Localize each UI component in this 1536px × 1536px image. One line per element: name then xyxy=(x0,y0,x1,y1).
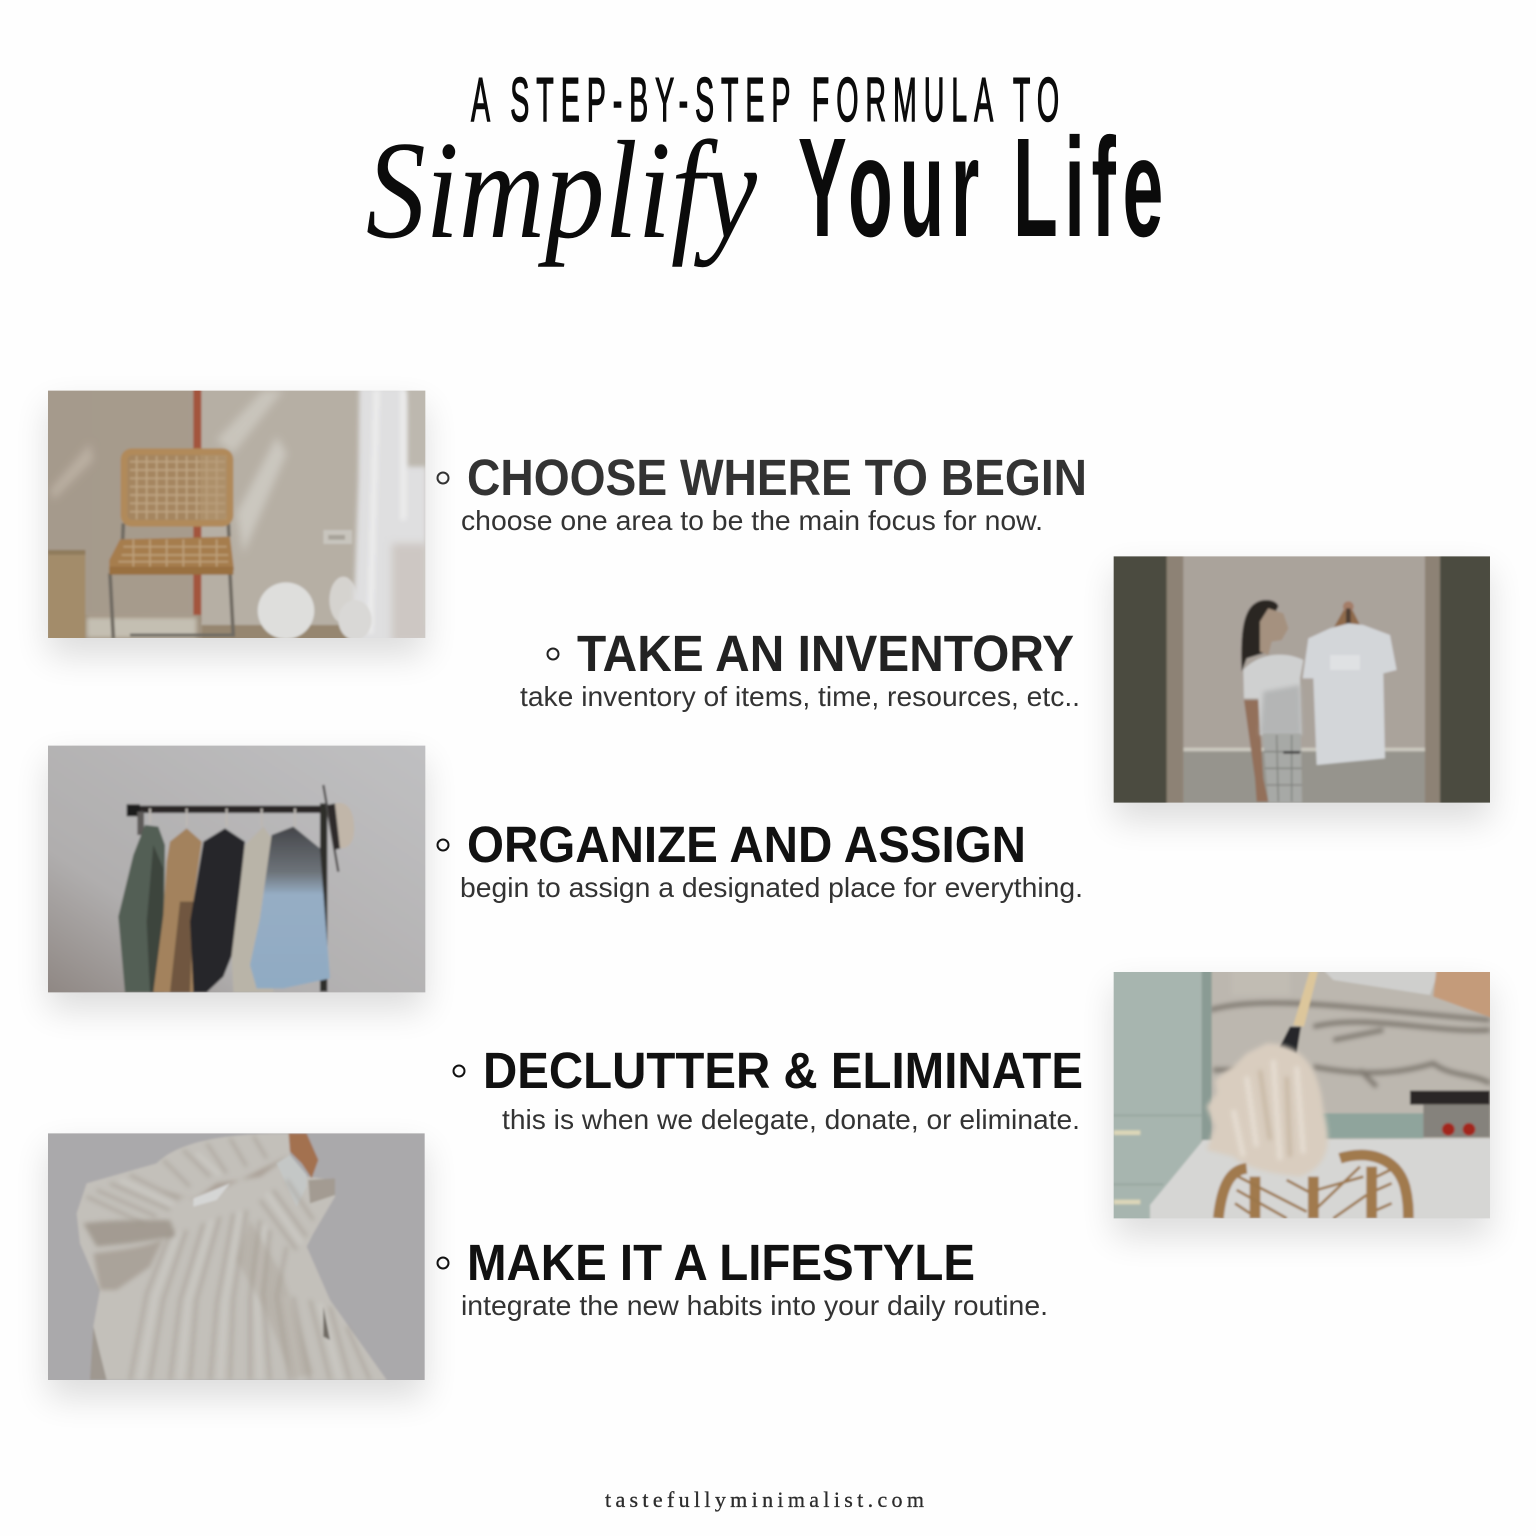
heading: TAKE AN INVENTORY xyxy=(577,625,1074,682)
step 1 xyxy=(438,449,1087,536)
heading: ORGANIZE AND ASSIGN xyxy=(467,816,1026,873)
bullet xyxy=(438,840,448,850)
photo: knit sweater xyxy=(43,1127,430,1398)
heading: DECLUTTER & ELIMINATE xyxy=(483,1042,1083,1099)
step 3 xyxy=(438,816,1083,903)
title xyxy=(366,66,1170,268)
photo: clothes on a rack xyxy=(43,742,430,1010)
bullet xyxy=(438,472,448,484)
step 2 xyxy=(520,625,1080,712)
step 5 xyxy=(438,1234,1048,1321)
bullet xyxy=(548,648,558,660)
description: begin to assign a designated place for everything. xyxy=(460,872,1083,903)
step 4 xyxy=(454,1042,1083,1135)
description: take inventory of items, time, resources, etc.. xyxy=(520,681,1080,712)
description: this is when we delegate, donate, or eliminate. xyxy=(502,1104,1080,1135)
footer website: tastefullyminimalist.com xyxy=(605,1487,926,1512)
photo: woman holding white t-shirt xyxy=(1110,552,1493,821)
bullet xyxy=(454,1066,464,1076)
heading: CHOOSE WHERE TO BEGIN xyxy=(467,449,1087,506)
heading: MAKE IT A LIFESTYLE xyxy=(467,1234,975,1291)
photo: feather duster in a kitchen xyxy=(1110,967,1493,1237)
description: choose one area to be the main focus for now. xyxy=(461,505,1043,536)
bullet xyxy=(438,1258,448,1268)
photo: rattan chair xyxy=(43,387,434,656)
description: integrate the new habits into your daily routine. xyxy=(461,1290,1048,1321)
title words: your life: Your Life xyxy=(798,108,1170,266)
script word: simplify: Simplify xyxy=(366,113,758,268)
